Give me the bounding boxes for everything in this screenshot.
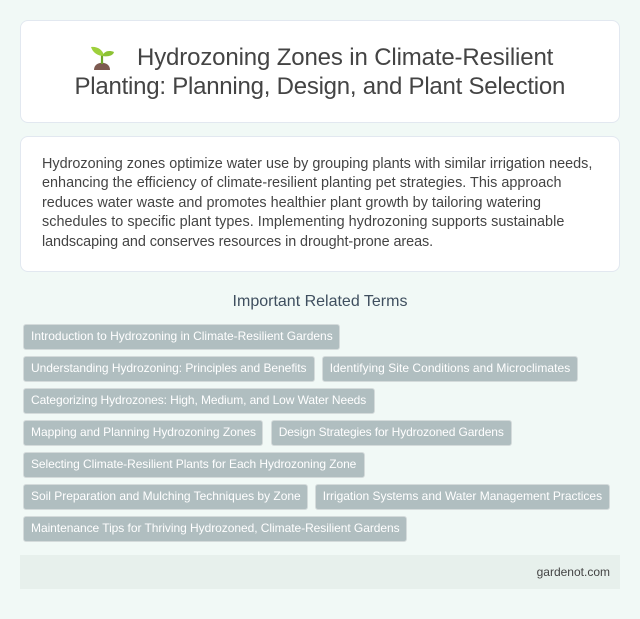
tag: Irrigation Systems and Water Management Practices <box>323 489 602 503</box>
title: Planting: Planning, Design, and Plant Selection <box>74 73 565 100</box>
tag <box>23 420 263 446</box>
tag: Mapping and Planning Hydrozoning Zones <box>31 425 256 439</box>
intro text <box>42 156 592 250</box>
intro text: reduces water waste and promotes healthier plant growth by tailoring watering <box>42 195 541 211</box>
title: Hydrozoning Zones in Climate-Resilient <box>137 44 553 71</box>
tag: Identifying Site Conditions and Microclimates <box>330 361 570 375</box>
tag: Categorizing Hydrozones: High, Medium, and Low Water Needs <box>31 393 366 407</box>
tag <box>322 356 578 382</box>
tag <box>23 516 407 542</box>
tag <box>23 356 315 382</box>
tag <box>23 484 308 510</box>
intro text: landscaping and conserves resources in drought-prone areas. <box>42 234 433 250</box>
header panel <box>20 20 620 123</box>
intro text: schedules to specific plant types. Implementing hydrozoning supports sustainable <box>42 214 564 230</box>
tag <box>315 484 610 510</box>
tag <box>23 452 365 478</box>
heading: related terms: Important Related Terms <box>233 293 407 310</box>
tag: Selecting Climate-Resilient Plants for Each Hydrozoning Zone <box>31 457 356 471</box>
intro text: Hydrozoning zones optimize water use by grouping plants with similar irrigation needs, <box>42 156 592 172</box>
footer text: gardenot.com <box>537 565 610 579</box>
intro text: enhancing the efficiency of climate-resilient planting pet strategies. This approach <box>42 175 562 191</box>
tag: Introduction to Hydrozoning in Climate-Resilient Gardens <box>31 329 333 343</box>
icon: sprout <box>91 46 114 70</box>
tag: Maintenance Tips for Thriving Hydrozoned, Climate-Resilient Gardens <box>31 521 400 535</box>
tag: Design Strategies for Hydrozoned Gardens <box>279 425 504 439</box>
tag <box>23 324 340 350</box>
title <box>74 44 565 100</box>
tag <box>23 388 375 414</box>
footer bar <box>20 555 620 589</box>
tag: Understanding Hydrozoning: Principles and Benefits <box>31 361 306 375</box>
tag list <box>23 324 610 542</box>
tag <box>271 420 512 446</box>
tag: Soil Preparation and Mulching Techniques by Zone <box>31 489 301 503</box>
intro panel <box>20 136 620 272</box>
